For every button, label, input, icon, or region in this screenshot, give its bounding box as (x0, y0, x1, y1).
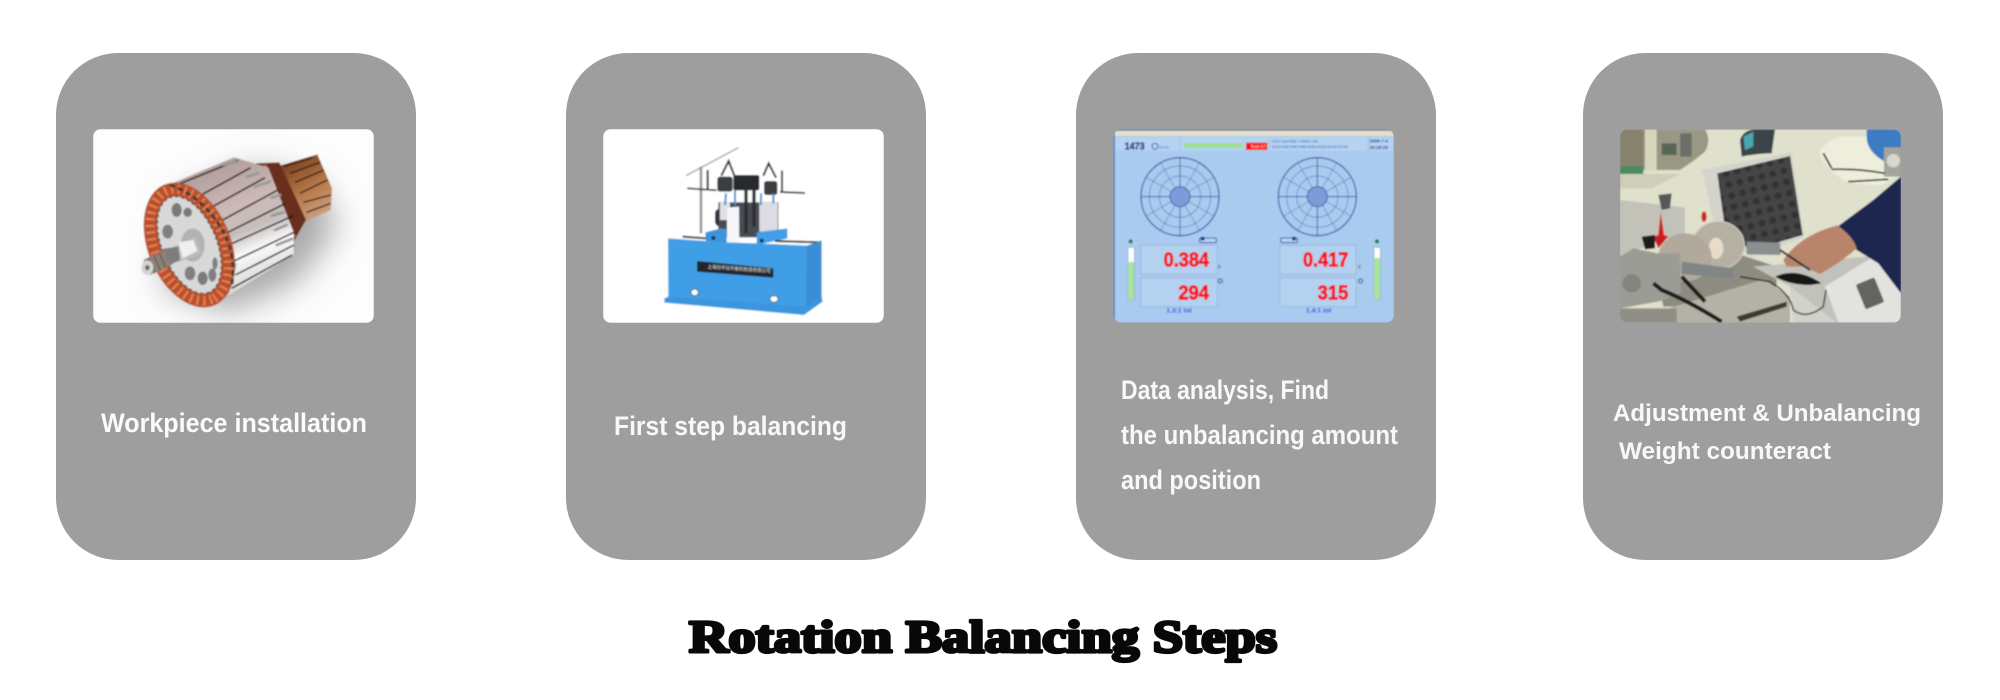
label: workpiece installation: Workpiece installation (101, 408, 367, 438)
vibration sensors (1682, 242, 1781, 278)
label: data analysis: the unbalancing amount (1121, 420, 1398, 450)
label: data analysis: Data analysis, Find (1121, 375, 1329, 405)
panel: adjustment and counterweight (1583, 53, 1943, 560)
title: Rotation Balancing Steps (689, 611, 1277, 662)
right selector and units (1281, 237, 1363, 283)
image: analysis software screen (1113, 129, 1394, 323)
left selector and units (1200, 237, 1222, 283)
rotor disks (1658, 221, 1744, 281)
right level gauge (1374, 239, 1380, 300)
name plate (697, 261, 773, 278)
right selector and units: g (1358, 263, 1361, 268)
label: adjustment and counterweight: Weight counteract (1619, 438, 1831, 465)
header status bar: FOIX Jeue MAid 1 GMOD LAN (1272, 140, 1318, 144)
header status bar: Test X7 (1250, 144, 1266, 149)
panel: data analysis (1076, 53, 1436, 560)
shadowed machine bed (1657, 253, 1777, 307)
panel: first step balancing (566, 53, 926, 560)
laminated core (168, 157, 294, 296)
drive and supports (708, 161, 782, 244)
right polar dial (1278, 158, 1356, 236)
technician hand and sleeve (1780, 177, 1901, 293)
copper commutator (256, 154, 332, 241)
image: armature rotor (93, 129, 374, 323)
label: adjustment and counterweight: Adjustment & Unbalancing (1613, 400, 1921, 427)
label: data analysis (1121, 375, 1398, 495)
right readouts: 1.4:1 tol (1306, 307, 1332, 314)
lower aluminium case (1740, 256, 1901, 323)
header status bar: De bi (1159, 144, 1169, 149)
header status bar: 0H10 0H30 0H50 0H60 0H80 0H100 0H120 0H140 (1272, 145, 1348, 149)
header status bar: 19:28:28 (1369, 145, 1388, 150)
red sensor clamp (1642, 193, 1707, 249)
right readouts: 0.417 (1303, 249, 1348, 272)
blue base (664, 228, 823, 315)
left equipment case (1620, 200, 1685, 257)
label: first step balancing: First step balancing (614, 411, 847, 441)
image: balancing machine (603, 129, 884, 323)
left level gauge (1128, 239, 1134, 300)
motor and bench (1620, 248, 1790, 323)
label: adjustment and counterweight (1613, 400, 1921, 465)
panel: workpiece installation (56, 53, 416, 560)
open case lid with foam (1702, 152, 1804, 257)
left readouts (1141, 245, 1217, 314)
right readouts: 315 (1318, 281, 1348, 304)
left polar dial (1141, 158, 1219, 236)
workshop background (1620, 129, 1901, 188)
right readouts (1280, 245, 1356, 314)
image: technician at field balancing kit (1620, 129, 1901, 323)
name plate: 上海剑平动平衡机制造有限公司 (707, 263, 771, 275)
header status bar: 2009-7-4 (1369, 139, 1388, 144)
header status bar (1116, 138, 1392, 151)
stand and pointer arm (686, 148, 805, 233)
header status bar: 1473 (1125, 142, 1145, 153)
label: data analysis: and position (1121, 465, 1261, 495)
left readouts: 1.3:1 tol (1166, 307, 1192, 314)
left readouts: 294 (1178, 281, 1209, 304)
left selector and units: g (1218, 263, 1221, 268)
left readouts: 0.384 (1164, 249, 1209, 272)
winding ring and hub (141, 182, 236, 308)
